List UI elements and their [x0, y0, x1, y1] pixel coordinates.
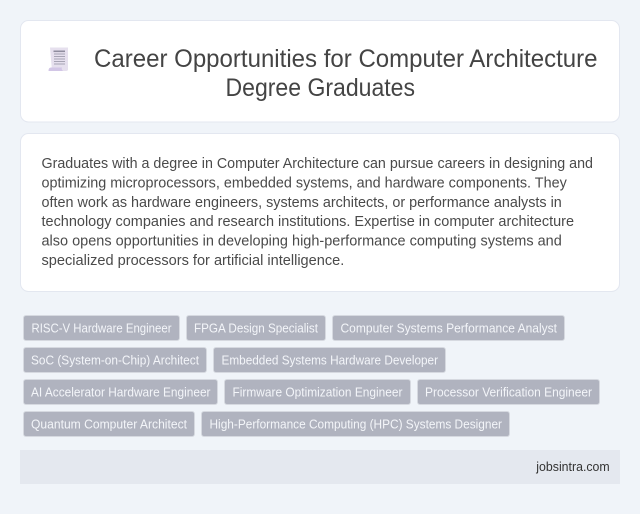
tag: High-Performance Computing (HPC) Systems Designer — [202, 412, 510, 436]
tag: SoC (System-on-Chip) Architect — [24, 348, 206, 372]
tag: Embedded Systems Hardware Developer — [214, 348, 446, 372]
tag: AI Accelerator Hardware Engineer — [24, 380, 218, 404]
tag: RISC-V Hardware Engineer — [24, 316, 180, 340]
text block: description paragraph: often work as hardware engineers, systems architects, or performance analysts in — [42, 194, 562, 211]
tag: Firmware Optimization Engineer — [224, 380, 410, 404]
text block: description paragraph: optimizing microprocessors, embedded systems, and hardware components. They — [42, 174, 567, 191]
title — [94, 45, 598, 102]
tag: Computer Systems Performance Analyst — [332, 316, 564, 340]
icon: document scroll — [48, 48, 68, 71]
panel: header — [20, 20, 620, 122]
tag: AI Accelerator Hardware Engineer: AI Accelerator Hardware Engineer — [31, 384, 211, 400]
tag: High-Performance Computing (HPC) Systems Designer: High-Performance Computing (HPC) Systems Designer — [210, 416, 503, 432]
text block: description paragraph: technology companies and research institutions. Expertise in computer architecture — [42, 213, 574, 230]
text block: description paragraph: Graduates with a degree in Computer Architecture can pursue careers in designing and — [42, 155, 593, 172]
tag: Quantum Computer Architect — [24, 412, 194, 436]
tag: FPGA Design Specialist: FPGA Design Specialist — [194, 320, 318, 336]
title: Degree Graduates — [226, 74, 415, 102]
text block: description paragraph — [42, 155, 593, 269]
footer source text: jobsintra.com — [535, 459, 610, 474]
tag: Processor Verification Engineer: Processor Verification Engineer — [425, 384, 593, 400]
footer — [20, 450, 620, 484]
tag: SoC (System-on-Chip) Architect: SoC (System-on-Chip) Architect — [31, 352, 199, 368]
tag: RISC-V Hardware Engineer: RISC-V Hardware Engineer — [32, 320, 172, 336]
tag: FPGA Design Specialist — [186, 316, 326, 340]
tag: Quantum Computer Architect: Quantum Computer Architect — [31, 416, 187, 432]
tag: Embedded Systems Hardware Developer: Embedded Systems Hardware Developer — [222, 352, 439, 368]
panel: description — [20, 134, 620, 292]
text block: description paragraph: specialized processors for artificial intelligence. — [42, 252, 344, 269]
tag: Computer Systems Performance Analyst: Computer Systems Performance Analyst — [340, 320, 557, 336]
tag: Processor Verification Engineer — [418, 380, 600, 404]
tag list: career roles — [24, 316, 600, 436]
tag: Firmware Optimization Engineer: Firmware Optimization Engineer — [232, 384, 403, 400]
title: Career Opportunities for Computer Architecture — [94, 45, 598, 73]
text block: description paragraph: also opens opportunities in developing high-performance computing systems and — [42, 233, 562, 250]
